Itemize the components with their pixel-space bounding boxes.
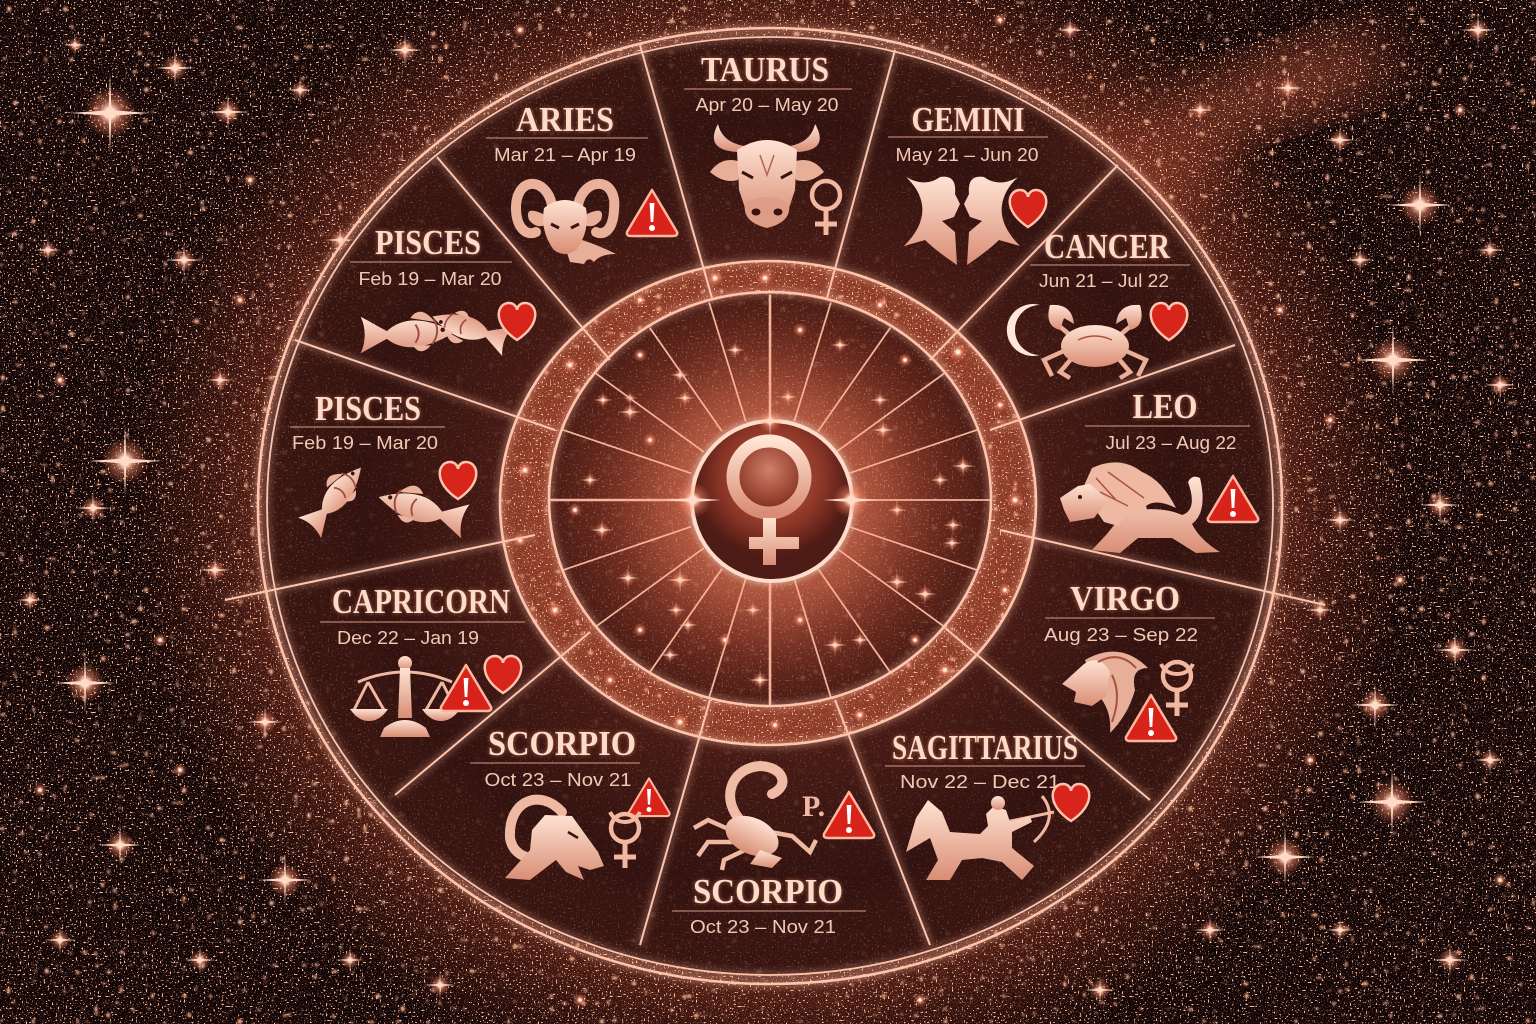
icon: two fish — [295, 456, 471, 538]
icon: heart — [1053, 784, 1089, 821]
icon: libra scales — [350, 656, 460, 737]
icon: warning triangle — [628, 778, 670, 816]
zodiac panels ring — [262, 36, 1278, 976]
panel: Cancer: CANCER — [1044, 227, 1171, 266]
sunburst rays — [549, 294, 991, 706]
panel: Scorpio left: SCORPIO — [488, 724, 636, 763]
panel: Pisces upper — [350, 223, 535, 360]
panel: Gemini: May 21 – Jun 20 — [896, 145, 1038, 165]
panel: Aries: Mar 21 – Apr 19 — [494, 145, 636, 165]
panel: Aries — [486, 100, 677, 264]
panel: Capricorn — [320, 582, 525, 737]
centre venus emblem — [646, 375, 896, 625]
panel: Capricorn: CAPRICORN — [332, 582, 510, 621]
wheel rings and spoke dividers — [225, 28, 1325, 984]
icon: mercury-like glyph — [610, 812, 640, 868]
icon: goat head — [505, 800, 604, 880]
icon: scorpion — [694, 766, 816, 870]
icon: heart — [440, 462, 476, 499]
icon: twins — [904, 177, 1020, 265]
icon: warning triangle — [627, 190, 677, 236]
icon: heart — [1010, 190, 1046, 227]
panel: Leo: LEO — [1132, 387, 1198, 426]
panel: Capricorn: Dec 22 – Jan 19 — [337, 628, 479, 648]
panel: Pisces upper: Feb 19 – Mar 20 — [358, 269, 502, 289]
icon: warning triangle — [1126, 695, 1176, 741]
panel: Scorpio bottom: Oct 23 – Nov 21 — [690, 917, 836, 937]
icon: venus glyph — [812, 181, 840, 235]
icon: warning triangle — [824, 792, 874, 838]
panel: Virgo: Aug 23 – Sep 22 — [1044, 625, 1198, 645]
icon: horned planet glyph — [1161, 662, 1193, 716]
panel: Scorpio left: Oct 23 – Nov 21 — [484, 770, 632, 790]
icon: crescent moon — [1007, 304, 1040, 356]
icon: warning triangle — [1208, 476, 1258, 522]
icon: maiden profile — [1062, 652, 1148, 733]
icon: heart — [499, 303, 535, 340]
panel: Sagittarius: SAGITTARIUS — [892, 728, 1078, 767]
panel: Scorpio left — [470, 724, 670, 880]
panel: Aries: ARIES — [516, 100, 614, 139]
icon: bull head — [710, 124, 824, 228]
panel: Taurus — [684, 50, 852, 235]
panel: Cancer: Jun 21 – Jul 22 — [1039, 271, 1169, 291]
icon: centaur archer — [906, 796, 1054, 880]
icon: crab — [1044, 305, 1146, 378]
panel: Pisces lower: Feb 19 – Mar 20 — [292, 433, 438, 453]
icon: lion — [1060, 462, 1220, 553]
panel: Gemini: GEMINI — [912, 100, 1024, 139]
panel: Leo — [1060, 387, 1258, 553]
panel: Sagittarius — [885, 728, 1089, 880]
panel: Scorpio bottom — [672, 766, 874, 937]
panel: Taurus: TAURUS — [701, 50, 829, 89]
panel: Gemini — [888, 100, 1048, 265]
panel: Pisces upper: PISCES — [375, 223, 481, 262]
icon: warning triangle — [441, 665, 491, 711]
icon: heart — [1151, 303, 1187, 340]
inner disk with stars — [513, 270, 1023, 732]
panel: Sagittarius: Nov 22 – Dec 21 — [900, 772, 1060, 792]
panel: Virgo — [1044, 579, 1215, 741]
panel: Scorpio bottom: SCORPIO — [693, 872, 843, 911]
panel: Taurus: Apr 20 – May 20 — [696, 95, 838, 115]
panel: Pisces lower — [290, 389, 476, 538]
panel: Virgo: VIRGO — [1070, 579, 1180, 618]
panel: Pisces lower: PISCES — [315, 389, 421, 428]
panel: Cancer — [1007, 227, 1190, 378]
panel: Leo: Jul 23 – Aug 22 — [1106, 433, 1236, 453]
icon: ram head — [516, 184, 616, 264]
icon: two fish — [361, 300, 513, 360]
icon: heart — [485, 656, 521, 693]
icon: pluto glyph: P. — [802, 790, 825, 823]
